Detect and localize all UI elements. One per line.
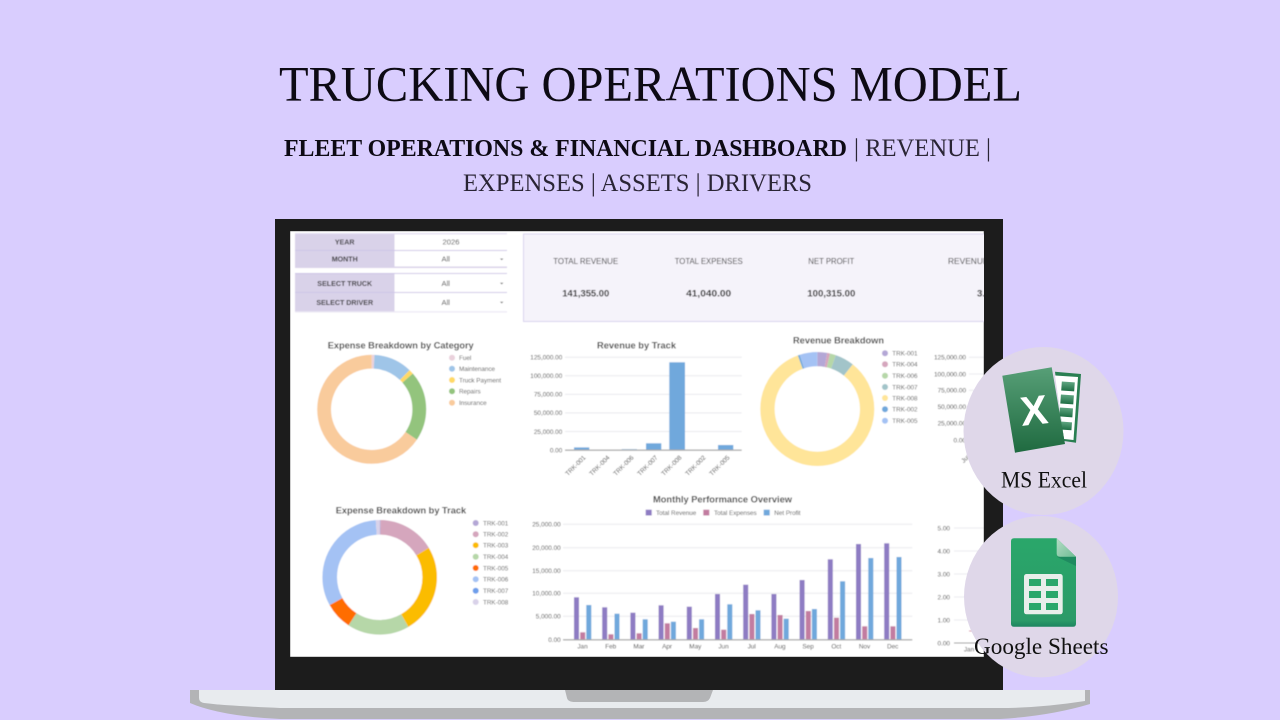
KPI: net profit: 100,315.00 bbox=[807, 288, 855, 299]
chart: monthly performance overview: 25,000.00 bbox=[532, 522, 561, 529]
title: TRUCKING OPERATIONS MODEL bbox=[279, 56, 1022, 112]
chart: revenue by track: 0.00 bbox=[550, 447, 563, 454]
KPI: net profit: NET PROFIT bbox=[808, 256, 854, 266]
chart: monthly performance overview: Monthly Performance Overview bbox=[653, 494, 793, 505]
chart: cut-off revenue chart at right: 25,000.00 bbox=[938, 421, 966, 428]
chart: cut-off ratio chart at right: Jan bbox=[964, 646, 975, 654]
chart: revenue breakdown bbox=[767, 336, 918, 459]
legend: category: Fuel bbox=[459, 355, 471, 362]
month labels bbox=[577, 644, 899, 650]
chart: monthly performance overview: 0.00 bbox=[548, 637, 561, 644]
filter panel bbox=[295, 233, 507, 312]
chart: expense breakdown by track: Expense Breakdown by Track bbox=[336, 506, 467, 516]
KPI panel bbox=[524, 234, 994, 322]
donut: track bbox=[330, 527, 430, 627]
legend: monthly: Net Profit bbox=[774, 510, 801, 517]
badge: Google Sheets bbox=[964, 516, 1118, 677]
icon: Excel bbox=[1002, 367, 1081, 453]
chart: monthly performance overview: 20,000.00 bbox=[532, 545, 561, 552]
filter panel: All bbox=[441, 254, 450, 263]
legend: track: TRK-004 bbox=[483, 554, 509, 561]
badge: MS Excel bbox=[964, 347, 1124, 515]
legend: revenue bbox=[882, 350, 918, 425]
axis labels: trucks: TRK-002 bbox=[684, 454, 708, 478]
chart: cut-off ratio chart at right: 0.00 bbox=[938, 640, 950, 647]
legend: category: Repairs bbox=[459, 389, 481, 396]
KPI: total revenue: 141,355.00 bbox=[562, 288, 609, 299]
legend: category: Insurance bbox=[459, 400, 487, 407]
KPI: total expenses: TOTAL EXPENSES bbox=[675, 256, 743, 266]
label: MS Excel: MS Excel bbox=[1001, 468, 1087, 493]
legend: track bbox=[473, 520, 509, 606]
chart: revenue by track: 125,000.00 bbox=[530, 355, 563, 362]
chart: cut-off ratio chart at right bbox=[938, 525, 984, 654]
chart: cut-off revenue chart at right: 125,000.00 bbox=[934, 355, 966, 362]
KPI: total revenue bbox=[553, 256, 619, 299]
chart: cut-off ratio chart at right: 2.00 bbox=[938, 594, 950, 601]
icon: Excel: X bbox=[1018, 386, 1050, 435]
legend: revenue: TRK-004 bbox=[892, 362, 918, 369]
KPI: revenue per truck, cut off: 3. bbox=[977, 288, 985, 299]
month labels: Jul bbox=[748, 644, 756, 650]
chart: cut-off ratio chart at right: 3.00 bbox=[938, 571, 950, 578]
laptop base bbox=[190, 690, 1090, 719]
legend: track: TRK-008 bbox=[483, 599, 509, 606]
axis labels: trucks: TRK-005 bbox=[708, 454, 732, 478]
legend: track: TRK-003 bbox=[483, 543, 509, 550]
axis labels: trucks: TRK-007 bbox=[636, 454, 660, 478]
chart: monthly performance overview: 15,000.00 bbox=[532, 568, 561, 575]
chart: revenue by track: 25,000.00 bbox=[534, 429, 563, 436]
chart: revenue by track: Revenue by Track bbox=[597, 340, 677, 352]
filter panel: SELECT DRIVER bbox=[316, 299, 373, 307]
legend: track: TRK-001 bbox=[483, 520, 509, 527]
legend: monthly bbox=[646, 510, 801, 517]
chart: cut-off revenue chart at right: 0.00 bbox=[954, 437, 966, 444]
donut: revenue bbox=[767, 359, 867, 459]
filter panel: YEAR bbox=[335, 239, 355, 247]
bars: net profit bbox=[586, 557, 902, 640]
icon: Google Sheets bbox=[1011, 538, 1076, 627]
legend: category bbox=[449, 355, 501, 407]
KPI: revenue per truck, cut off bbox=[948, 257, 984, 298]
legend: track: TRK-007 bbox=[483, 588, 509, 595]
axis labels: trucks: TRK-008 bbox=[660, 454, 684, 478]
legend: revenue: TRK-006 bbox=[892, 373, 918, 380]
filter panel: SELECT TRUCK bbox=[317, 280, 373, 288]
chart: monthly performance overview: 10,000.00 bbox=[532, 591, 561, 598]
chart: revenue by track: 75,000.00 bbox=[534, 392, 563, 399]
chart: revenue breakdown: Revenue Breakdown bbox=[793, 336, 884, 346]
subtitle bold part: FLEET OPERATIONS & FINANCIAL DASHBOARD bbox=[284, 136, 847, 162]
axis labels: trucks: TRK-004 bbox=[588, 454, 612, 478]
chart: revenue by track bbox=[530, 340, 742, 478]
KPI: total expenses: 41,040.00 bbox=[686, 288, 731, 299]
legend: monthly: Total Revenue bbox=[656, 510, 697, 517]
chart: expense breakdown by category bbox=[324, 340, 501, 457]
legend: revenue: TRK-007 bbox=[892, 384, 918, 391]
chart: cut-off revenue chart at right: Jun bbox=[960, 452, 973, 465]
month labels: Jun bbox=[718, 644, 729, 650]
legend: track: TRK-005 bbox=[483, 565, 509, 572]
legend: track: TRK-002 bbox=[483, 532, 509, 539]
filter panel: MONTH bbox=[332, 255, 358, 263]
KPI: total revenue: TOTAL REVENUE bbox=[553, 256, 619, 266]
chart: cut-off revenue chart at right: 100,000.00 bbox=[934, 371, 966, 378]
subtitle second line: EXPENSES | ASSETS | DRIVERS bbox=[463, 170, 812, 197]
month labels: Apr bbox=[662, 644, 673, 650]
axis labels: trucks: TRK-001 bbox=[564, 454, 588, 478]
chart: cut-off revenue chart at right: 75,000.00 bbox=[938, 388, 966, 395]
chart: revenue by track: 100,000.00 bbox=[530, 373, 563, 380]
label: Google Sheets: Google Sheets bbox=[974, 634, 1109, 659]
bars: revenue by track bbox=[574, 362, 733, 450]
month labels: Feb bbox=[605, 644, 617, 650]
axis labels: trucks: TRK-006 bbox=[612, 454, 636, 478]
subtitle regular part: | REVENUE | bbox=[854, 135, 991, 162]
dashboard screen bbox=[290, 231, 994, 657]
axis labels: trucks bbox=[564, 454, 730, 476]
subtitle bbox=[284, 135, 991, 197]
month labels: Oct bbox=[831, 644, 841, 650]
filter panel: All bbox=[441, 279, 450, 288]
legend: track: TRK-006 bbox=[483, 577, 509, 584]
filter panel: All bbox=[441, 298, 450, 307]
month labels: May bbox=[689, 644, 702, 650]
bars: total revenue bbox=[574, 543, 889, 640]
filter panel: 2026 bbox=[443, 238, 459, 247]
bars: total expenses bbox=[580, 611, 895, 640]
chart: cut-off ratio chart at right: 4.00 bbox=[938, 548, 950, 555]
month labels: Jan bbox=[577, 644, 588, 650]
KPI: revenue per truck, cut off: REVENUE bbox=[948, 256, 989, 266]
month labels: Mar bbox=[633, 644, 645, 650]
legend: revenue: TRK-008 bbox=[892, 395, 918, 402]
KPI: total expenses bbox=[675, 256, 743, 299]
chart: expense breakdown by category: Expense Breakdown by Category bbox=[328, 340, 474, 352]
donut: category bbox=[324, 362, 419, 457]
legend: category: Truck Payment bbox=[459, 377, 501, 384]
chart: cut-off ratio chart at right: 1.00 bbox=[938, 617, 950, 624]
chart: cut-off revenue chart at right bbox=[934, 355, 984, 465]
legend: category: Maintenance bbox=[459, 366, 496, 373]
legend: revenue: TRK-002 bbox=[892, 407, 918, 414]
month labels: Aug bbox=[774, 644, 786, 650]
chart: monthly performance overview bbox=[532, 494, 912, 650]
chart: cut-off ratio chart at right: 5.00 bbox=[938, 525, 950, 532]
laptop screen bezel bbox=[275, 219, 1003, 690]
KPI: net profit bbox=[807, 256, 855, 299]
month labels: Sep bbox=[802, 644, 814, 650]
month labels: Dec bbox=[887, 644, 899, 650]
legend: monthly: Total Expenses bbox=[714, 510, 757, 517]
month labels: Nov bbox=[859, 644, 871, 650]
legend: revenue: TRK-001 bbox=[892, 351, 918, 358]
chart: revenue by track: 50,000.00 bbox=[534, 410, 563, 417]
legend: revenue: TRK-005 bbox=[892, 418, 918, 425]
chart: cut-off revenue chart at right: 50,000.00 bbox=[938, 404, 966, 411]
chart: expense breakdown by track bbox=[330, 506, 509, 627]
chart: monthly performance overview: 5,000.00 bbox=[536, 614, 561, 621]
